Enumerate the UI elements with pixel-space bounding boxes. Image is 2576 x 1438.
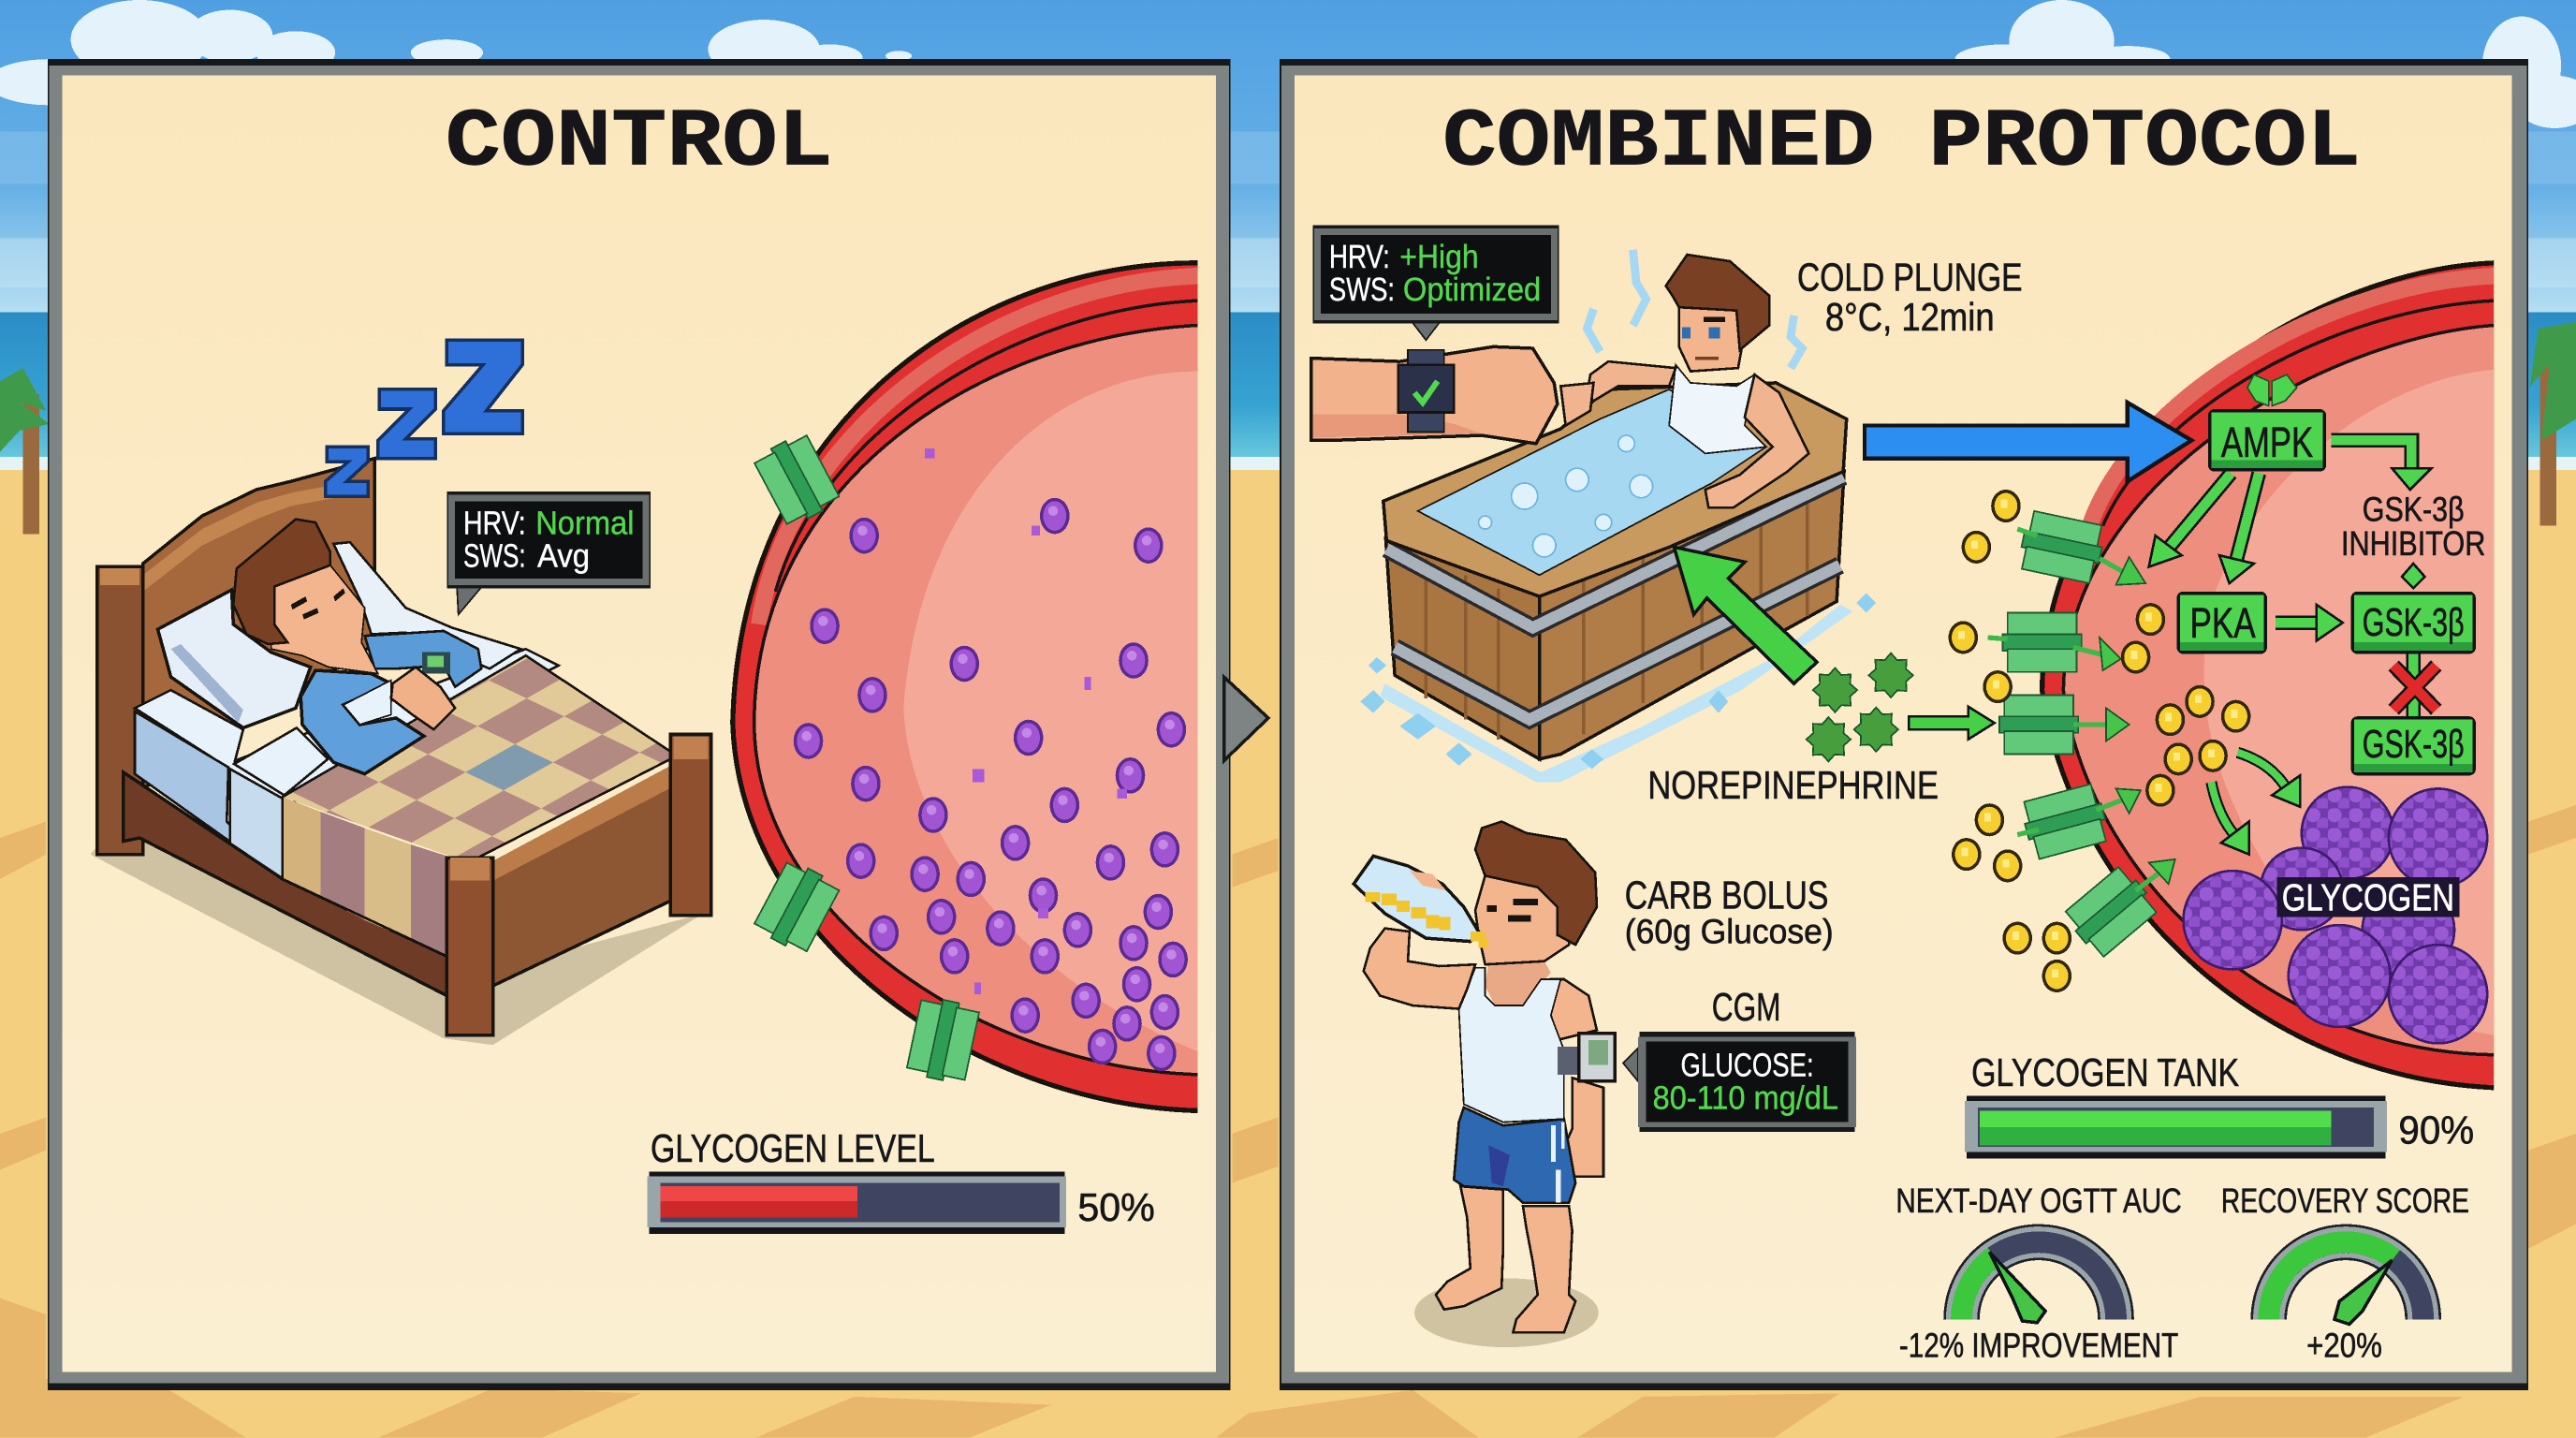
illustration: carb bolus drinker <box>1354 822 1615 1347</box>
muscle cell: control <box>733 263 1249 1110</box>
title: combined protocol: COMBINED PROTOCOL <box>1442 97 2361 191</box>
illustration: sleeping in bed <box>91 459 711 1045</box>
glucose transporters: control <box>753 431 980 1085</box>
illustration: wrist with smartwatch <box>1311 346 1558 444</box>
callout: hrv high <box>1312 225 1559 340</box>
chest <box>1486 961 1551 1005</box>
callout: hrv high: SWS: <box>1329 272 1395 309</box>
label: cold plunge <box>1797 257 2022 340</box>
signalling pathway <box>2149 374 2485 855</box>
glucose molecules <box>1949 490 2250 992</box>
tub hoops <box>1386 477 1843 720</box>
legs and feet <box>1436 1186 1503 1310</box>
label: carb bolus: CARB BOLUS <box>1625 874 1828 918</box>
rim and water <box>1383 383 1847 596</box>
node: pka: PKA <box>2190 598 2257 647</box>
callout: hrv normal: SWS: <box>463 539 526 575</box>
headboard <box>143 459 374 788</box>
callout: hrv normal: Avg <box>537 539 590 575</box>
gauge: recovery score: RECOVERY SCORE <box>2221 1183 2469 1221</box>
arrow: between panels <box>1224 677 1268 761</box>
tub staves <box>1426 486 1808 740</box>
node: pka <box>2176 592 2267 654</box>
gauge: next-day ogtt auc <box>1895 1183 2182 1365</box>
icon: red cross <box>2393 666 2437 710</box>
curved arrows to glycogen <box>2211 753 2287 835</box>
small transport arrows <box>1988 529 2162 890</box>
value: 50%: 50% <box>1077 1186 1155 1231</box>
label: carb bolus <box>1625 874 1834 951</box>
label: gsk-3 beta inhibitor: GSK-3β <box>2363 492 2465 529</box>
label: cgm: CGM <box>1712 986 1781 1030</box>
panel: control <box>48 59 1249 1390</box>
pillows <box>333 542 520 668</box>
node: inhibited gsk-3 beta: GSK-3β <box>2363 723 2465 768</box>
node: inhibited gsk-3 beta <box>2351 716 2476 775</box>
label: gsk-3 beta inhibitor <box>2341 492 2485 564</box>
bather <box>1560 255 1808 507</box>
arrow: norepinephrine to transporter <box>1909 707 1995 740</box>
tank top <box>1459 968 1564 1123</box>
gauge: next-day ogtt auc: -12% IMPROVEMENT <box>1899 1328 2178 1365</box>
node: ampk <box>2208 409 2326 472</box>
raised arm <box>1364 929 1475 1009</box>
icon: sleep zzz <box>326 340 522 496</box>
bubbles <box>1479 435 1653 557</box>
title: control: CONTROL <box>446 97 833 191</box>
label: glycogen level: GLYCOGEN LEVEL <box>651 1127 935 1171</box>
steam <box>1587 250 1802 368</box>
icon: ampk activation <box>2247 374 2297 405</box>
gauge: recovery score: +20% <box>2306 1328 2382 1365</box>
glycogen granules <box>794 448 1188 1071</box>
bottle <box>1354 856 1479 942</box>
glycogen cluster <box>2183 787 2487 1043</box>
glycogen level bar <box>648 1127 1155 1234</box>
glycogen tank bar <box>1965 1051 2474 1158</box>
glucose transporters: combined <box>1999 510 2160 960</box>
illustration: cold plunge tub <box>1360 250 1876 782</box>
footboard <box>493 769 681 986</box>
bed rails <box>124 772 446 996</box>
arrow: norepinephrine to tub <box>1674 547 1817 683</box>
sleeper <box>233 520 481 774</box>
callout: hrv normal: HRV: <box>463 506 526 542</box>
norepinephrine molecules <box>1807 653 1913 761</box>
pathway arrows <box>2165 440 2413 718</box>
label: cold plunge: COLD PLUNGE <box>1797 257 2022 301</box>
quilt <box>283 655 677 956</box>
callout: glucose <box>1623 1032 1856 1132</box>
palm trees <box>0 322 2576 534</box>
gauge: recovery score <box>2221 1183 2469 1365</box>
node: gsk-3 beta <box>2351 592 2476 654</box>
mattress and sheets <box>135 649 559 805</box>
muscle cell: combined <box>2042 263 2546 1088</box>
label: gsk-3 beta inhibitor: INHIBITOR <box>2341 526 2485 564</box>
fold of sheet <box>234 727 328 795</box>
ice splash <box>1380 605 1853 782</box>
callout: hrv high: +High <box>1399 240 1479 276</box>
callout: glucose: 80-110 mg/dL <box>1653 1081 1838 1117</box>
shorts <box>1454 1108 1575 1203</box>
tub faces <box>1385 539 1540 759</box>
callout: hrv normal <box>446 492 651 614</box>
callout: hrv normal: Normal <box>535 506 634 542</box>
panel: combined protocol <box>1280 59 2546 1390</box>
label: cold plunge: 8°C, 12min <box>1825 296 1995 340</box>
node: gsk-3 beta: GSK-3β <box>2363 601 2465 646</box>
label: glycogen tank: GLYCOGEN TANK <box>1971 1051 2239 1096</box>
arrow: cold plunge to ampk <box>1865 403 2191 481</box>
cgm armband <box>1558 1047 1582 1075</box>
callout: hrv high: HRV: <box>1329 240 1390 276</box>
gauge: next-day ogtt auc: NEXT-DAY OGTT AUC <box>1895 1183 2182 1221</box>
label: glycogen: GLYCOGEN <box>2282 875 2454 918</box>
label: carb bolus: (60g Glucose) <box>1625 914 1834 951</box>
callout: hrv high: Optimized <box>1403 272 1541 309</box>
head <box>1475 875 1569 964</box>
callout: glucose: GLUCOSE: <box>1680 1049 1814 1084</box>
right arm <box>1551 979 1597 1040</box>
label: norepinephrine: NOREPINEPHRINE <box>1647 764 1939 808</box>
value: 90%: 90% <box>2398 1109 2474 1153</box>
node: ampk: AMPK <box>2221 418 2314 466</box>
